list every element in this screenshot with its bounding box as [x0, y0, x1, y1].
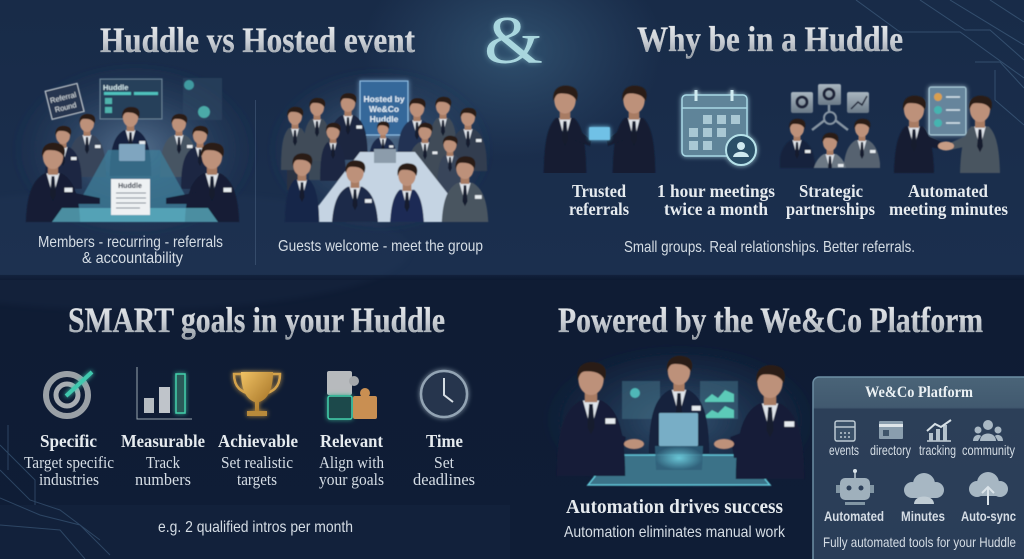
circuit decoration top right — [856, 0, 1024, 125]
caption: guests: Guests welcome - meet the group — [278, 238, 483, 255]
icon: minutes cloud — [904, 473, 944, 504]
label: measurable — [121, 431, 205, 489]
label: directory: directory — [870, 442, 911, 458]
label: achievable: Set realistic — [221, 453, 293, 472]
label: automated minutes — [889, 181, 1008, 219]
label: specific: Target specific — [24, 453, 114, 472]
label: time: deadlines — [413, 470, 475, 489]
label: strategic partnerships — [786, 181, 875, 219]
wall screen: Huddle — [103, 83, 128, 92]
referral board — [45, 83, 84, 119]
label: relevant — [319, 431, 384, 489]
label: 1 hour meetings: 1 hour meetings — [657, 181, 775, 201]
ampersand: & — [484, 2, 543, 78]
data panel — [183, 78, 222, 120]
icon: directory — [879, 421, 903, 439]
caption: members — [38, 234, 223, 267]
label: measurable: Track — [146, 453, 180, 472]
label: relevant: Align with — [319, 453, 384, 472]
label: automated: Automated — [824, 508, 884, 524]
holographic panels — [622, 381, 738, 419]
document — [111, 179, 150, 215]
platform card — [813, 377, 1024, 559]
hosted board: We&Co — [369, 104, 399, 114]
caption: automation — [564, 496, 786, 541]
label: automated minutes: meeting minutes — [889, 199, 1008, 219]
laptop — [119, 144, 145, 161]
meeting people and table — [26, 107, 239, 234]
referral board: Referral — [49, 90, 78, 105]
white table — [318, 151, 448, 223]
icon: strategic partnerships — [780, 83, 880, 168]
panel: SMART goals — [24, 300, 475, 536]
illustration: automation meeting — [557, 355, 804, 487]
label: time — [413, 431, 475, 489]
circuit decoration bottom left — [0, 425, 110, 559]
laptop — [659, 413, 698, 446]
caption: automation: Automation eliminates manual work — [564, 524, 786, 541]
caption: members: Members - recurring - referrals — [38, 234, 223, 251]
label: achievable — [218, 431, 298, 489]
label: measurable: Measurable — [121, 431, 205, 451]
label: specific — [24, 431, 114, 489]
panel: Huddle vs Hosted event — [10, 20, 495, 267]
label: tracking: tracking — [919, 442, 956, 458]
glass table — [588, 455, 770, 485]
document: Huddle — [118, 183, 142, 190]
label: strategic partnerships: Strategic — [799, 181, 863, 201]
example note: e.g. 2 qualified intros per month — [158, 519, 353, 536]
label: relevant: your goals — [319, 470, 384, 489]
icon: bar chart — [137, 367, 192, 419]
icon: auto-sync cloud — [969, 472, 1008, 505]
icon: events — [835, 421, 855, 441]
hosted board — [360, 81, 408, 135]
icon: tracking — [927, 420, 951, 441]
icon: community — [973, 420, 1003, 441]
label: relevant: Relevant — [320, 431, 383, 451]
icon: trusted referrals — [544, 86, 655, 182]
panel: Why be in a Huddle — [544, 19, 1008, 256]
hosted board: Huddle — [370, 114, 399, 124]
label: strategic partnerships: partnerships — [786, 199, 875, 219]
label: events: events — [829, 442, 859, 458]
icon: robot — [836, 469, 874, 505]
heading: SMART goals in your Huddle — [68, 300, 445, 340]
referral board: Round — [54, 100, 77, 114]
label: trusted referrals — [569, 181, 629, 219]
icon: target — [46, 372, 92, 416]
label: measurable: numbers — [135, 470, 191, 489]
label: automated minutes: Automated — [908, 181, 988, 201]
label: achievable: Achievable — [218, 431, 298, 451]
panel: Powered by the We&Co Platform — [540, 300, 1024, 559]
caption: automation: Automation drives success — [566, 496, 783, 518]
illustration: member huddle meeting — [26, 78, 240, 223]
label: minutes: Minutes — [901, 508, 945, 524]
label: time: Set — [434, 453, 454, 472]
laptop — [374, 149, 396, 163]
label: achievable: targets — [237, 470, 277, 489]
icon: trophy — [234, 372, 280, 416]
wall screen — [100, 79, 162, 119]
card title: We&Co Platform — [865, 384, 974, 401]
arms — [622, 436, 626, 444]
label: 1 hour meetings — [657, 181, 775, 219]
label: specific: industries — [39, 470, 99, 489]
hosted board: Hosted by — [363, 94, 405, 104]
illustration: hosted event — [280, 76, 488, 223]
tagline: Small groups. Real relationships. Better referrals. — [624, 239, 915, 256]
icon: automated minutes — [894, 87, 1000, 187]
ampersand: & — [484, 2, 543, 78]
heading: Why be in a Huddle — [637, 19, 903, 59]
heading: Huddle vs Hosted event — [100, 20, 415, 60]
caption: members: & accountability — [82, 250, 183, 267]
icon: puzzle — [327, 371, 377, 419]
icon: clock — [421, 371, 467, 417]
event people and table — [280, 92, 488, 223]
label: trusted referrals: referrals — [569, 199, 629, 219]
label: time: Time — [426, 431, 463, 451]
label: 1 hour meetings: twice a month — [664, 199, 768, 219]
icon: calendar — [682, 90, 756, 165]
label: trusted referrals: Trusted — [572, 181, 626, 201]
label: specific: Specific — [40, 431, 97, 451]
